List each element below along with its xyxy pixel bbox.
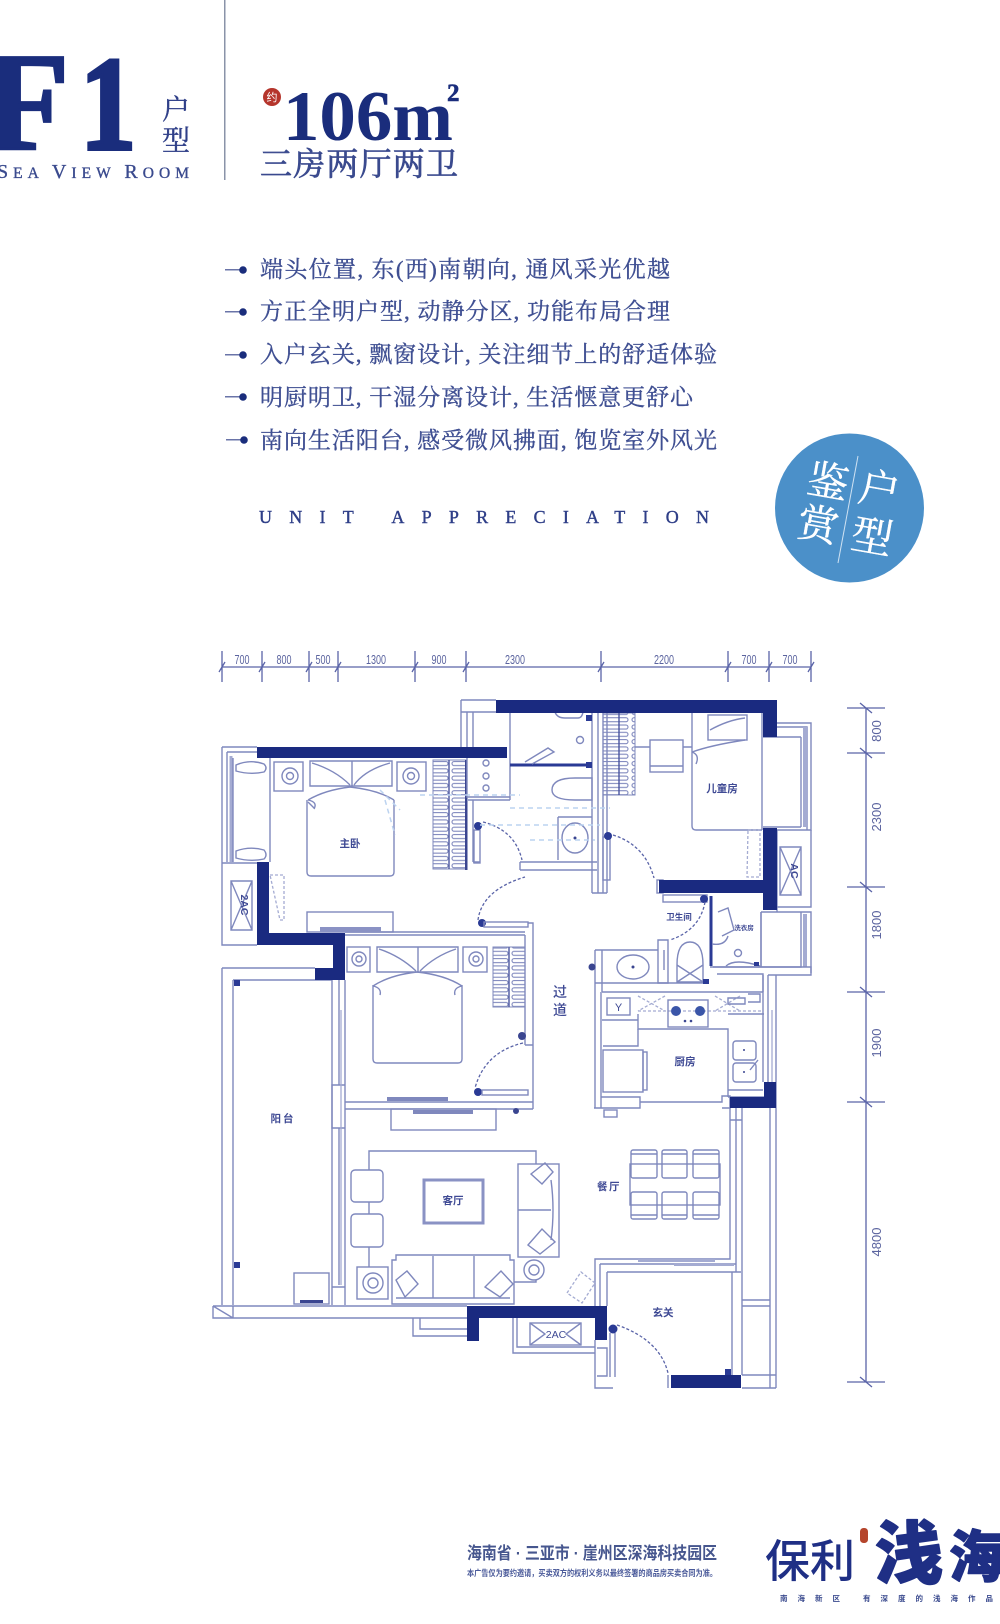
entry hall <box>567 1097 776 1388</box>
feature list: 入户玄关, 飘窗设计, 关注细节上的舒适体验 <box>260 342 717 367</box>
structural walls <box>257 700 777 1388</box>
furniture: bathroom <box>510 712 592 860</box>
balcony: 阳台 <box>270 1112 296 1125</box>
logo: Poly: 有深度的浅海作品 <box>863 1593 993 1603</box>
title: F1 unit type <box>0 25 190 183</box>
top dimensions: 700 <box>234 652 250 667</box>
furniture: second bathroom and laundry: 卫生间 <box>666 912 692 922</box>
furniture: master bedroom <box>231 758 528 932</box>
balcony <box>213 968 467 1318</box>
furniture: second bathroom and laundry: 洗衣房 <box>734 923 754 932</box>
furniture: kitchen <box>594 992 764 1117</box>
feature list: 南向生活阳台, 感受微风拂面, 饱览室外风光 <box>260 428 717 453</box>
subtitle: unit appreciation: UNIT APPRECIATION <box>259 507 709 527</box>
top dimensions: 2200 <box>654 652 674 667</box>
address text <box>467 1543 717 1578</box>
right dimensions: 1800 <box>869 911 884 939</box>
badge: unit appreciation circle: 赏 <box>794 499 844 552</box>
unit area: 106 m2: 约 <box>266 91 278 104</box>
right dimensions: 1900 <box>869 1029 884 1057</box>
feature list <box>225 257 717 453</box>
top dimensions <box>219 651 814 682</box>
top dimensions: 1300 <box>366 652 386 667</box>
logo: Poly: 浅 <box>875 1517 943 1593</box>
top dimensions: 700 <box>782 652 798 667</box>
room labels <box>340 782 738 1018</box>
right dimensions: 4800 <box>869 1228 884 1256</box>
top dimensions: 800 <box>276 652 292 667</box>
unit area: 106 m2: 106m <box>283 78 453 156</box>
right dimensions: 800 <box>869 720 884 742</box>
room labels: 过 <box>553 984 567 1000</box>
air conditioner ledge: 2AC <box>546 1329 567 1341</box>
furniture: living room <box>351 1151 559 1304</box>
feature list: 端头位置, 东(西)南朝向, 通风采光优越 <box>260 257 670 282</box>
right dimensions <box>847 703 885 1387</box>
room labels: 主卧 <box>340 837 361 850</box>
divider line <box>224 0 226 180</box>
logo: Poly: 保利 <box>765 1536 855 1587</box>
furniture: second bedroom <box>345 947 533 1130</box>
logo: Poly <box>765 1517 1000 1603</box>
top dimensions: 900 <box>432 652 446 667</box>
top dimensions: 500 <box>316 652 330 667</box>
badge: unit appreciation circle: 型 <box>848 511 896 563</box>
air conditioner ledge <box>413 1318 595 1353</box>
badge: unit appreciation circle: 户 <box>855 464 903 516</box>
watermark smudge <box>380 790 610 840</box>
entry hall: 玄关 <box>652 1306 674 1319</box>
feature list: 方正全明户型, 动静分区, 功能布局合理 <box>260 299 670 324</box>
top dimensions: 2300 <box>505 652 525 667</box>
right dimensions: 2300 <box>869 803 884 831</box>
furniture: dining table <box>597 1150 720 1219</box>
furniture: kitchen: 厨房 <box>674 1055 696 1068</box>
logo: Poly: 南海新区 <box>780 1593 840 1603</box>
unit area: 106 m2: 三房两厅两卫 <box>260 146 458 182</box>
furniture: child bedroom <box>603 713 801 895</box>
furniture: dining table: 餐厅 <box>597 1180 621 1193</box>
furniture: master bedroom: 2AC <box>238 894 250 916</box>
address text: 本广告仅为要约邀请，买卖双方的权利义务以最终签署的商品房买卖合同为准。 <box>467 1568 717 1578</box>
furniture: child bedroom: AC <box>788 863 800 879</box>
furniture: second bathroom and laundry <box>588 895 763 1108</box>
furniture: kitchen: Y <box>615 1002 623 1014</box>
furniture: living room: 客厅 <box>442 1194 464 1207</box>
floor plan <box>213 651 885 1388</box>
unit area: 106 m2: 2 <box>447 80 460 107</box>
title: F1 unit type: 1 <box>80 30 136 178</box>
badge: unit appreciation circle <box>775 434 924 582</box>
title: F1 unit type: 户 <box>162 94 190 126</box>
title: F1 unit type: S EA V IEW R OOM <box>0 161 189 183</box>
badge: unit appreciation circle: 鉴 <box>804 456 852 508</box>
unit area: 106 m2 <box>260 78 460 182</box>
top dimensions: 700 <box>742 652 756 667</box>
room labels: 儿童房 <box>706 782 738 795</box>
room labels: 道 <box>553 1002 567 1018</box>
thin outlines: upper wing <box>222 700 811 1388</box>
title: F1 unit type: 型 <box>162 125 190 157</box>
feature list: 明厨明卫, 干湿分离设计, 生活惬意更舒心 <box>260 385 694 410</box>
address text: 海南省 · 三亚市 · 崖州区深海科技园区 <box>467 1543 717 1563</box>
